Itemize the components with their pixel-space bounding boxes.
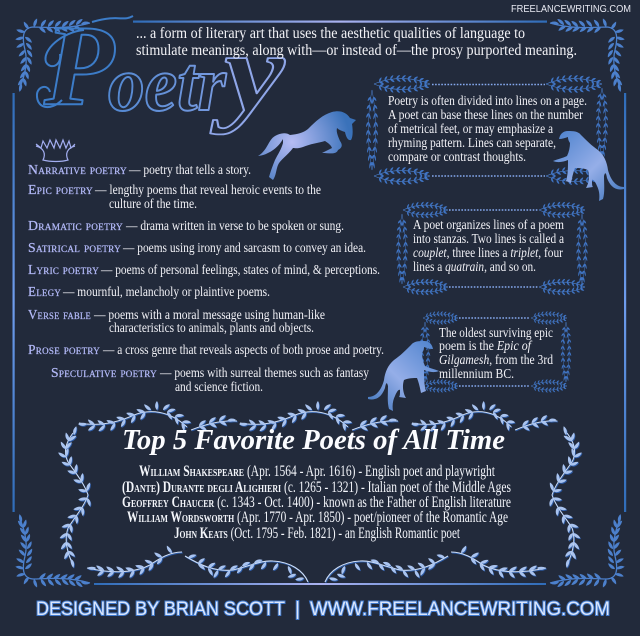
epic poetry: Epic poetry (28, 182, 93, 197)
speculative poetry: — poems with surreal themes such as fantasy (159, 365, 369, 380)
verse fable: Verse fable (28, 307, 91, 322)
title: Poetry (37, 2, 285, 135)
elegy: Elegy (28, 284, 61, 299)
panel: top 5 ornament frame (57, 401, 583, 583)
satirical poetry (28, 240, 366, 255)
panel: stanzas: into stanzas. Two lines is called a (413, 231, 564, 246)
panel: stanzas: A poet organizes lines of a poem (413, 217, 564, 232)
prose poetry: — a cross genre that reveals aspects of both prose and poetry. (102, 342, 384, 357)
verse fable (28, 307, 325, 335)
epic poetry: culture of the time. (109, 196, 197, 211)
list of poets: (Dante) Durante degli Alighieri (c. 1265 - 1321) - Italian poet of the Middle Ages (122, 479, 511, 496)
dramatic poetry: — drama written in verse to be spoken or sung. (125, 218, 344, 233)
verse fable: — poems with a moral message using human-like (93, 307, 325, 322)
satirical poetry: Satirical poetry (28, 240, 121, 255)
panel: oldest epic: millennium BC. (439, 366, 514, 381)
icon: panther on epic panel (368, 341, 439, 411)
lyric poetry (28, 262, 380, 277)
intro definition: ... a form of literary art that uses the aesthetic qualities of language to (136, 25, 525, 42)
footer credit (36, 598, 610, 620)
speculative poetry: Speculative poetry (51, 365, 157, 380)
prose poetry (28, 342, 384, 357)
panel: oldest epic: Gilgamesh, from the 3rd (439, 352, 553, 367)
list of poets: John Keats (Oct. 1795 - Feb. 1821) - an English Romantic poet (174, 525, 460, 542)
narrative poetry: — poetry that tells a story. (128, 162, 251, 177)
icon: panther on lines panel (553, 131, 624, 201)
epic poetry: — lengthy poems that reveal heroic events to the (94, 182, 321, 197)
epic poetry (28, 182, 321, 211)
icon: crown (36, 140, 75, 162)
panel: stanzas: lines a quatrain, and so on. (413, 259, 536, 274)
panel: lines: A poet can base these lines on the number (388, 107, 583, 122)
panel: lines: Poetry is often divided into lines on a page. (388, 93, 587, 108)
panel: lines: of metrical feet, or may emphasize a (388, 121, 553, 136)
list of poets (122, 463, 511, 542)
intro definition (136, 25, 577, 59)
title: Poetry: P (43, 2, 115, 129)
footer credit: DESIGNED BY BRIAN SCOTT (36, 598, 285, 620)
panel: lines: compare or contrast thoughts. (388, 149, 526, 164)
panel: lines: rhyming pattern. Lines can separate, (388, 135, 556, 150)
icon: leaping horse (258, 111, 356, 180)
satirical poetry: — poems using irony and sarcasm to convey an idea. (122, 240, 366, 255)
panel: stanzas: couplet, three lines a triplet, four (413, 245, 563, 260)
dramatic poetry (28, 218, 344, 233)
panel: lines (365, 74, 609, 186)
panel: oldest epic (419, 311, 572, 393)
list of poets: William Wordsworth (Apr. 1770 - Apr. 1850) - poet/pioneer of the Romantic Age (127, 509, 508, 526)
list of poets: William Shakespeare (Apr. 1564 - Apr. 1616) - English poet and playwright (139, 463, 495, 480)
title: Poetry: y (210, 10, 285, 135)
list of poetry types (28, 162, 384, 394)
dramatic poetry: Dramatic poetry (28, 218, 123, 233)
list of poets: Geoffrey Chaucer (c. 1343 - Oct. 1400) - known as the Father of English literature (122, 494, 511, 511)
lyric poetry: — poems of personal feelings, states of mind, & perceptions. (100, 262, 380, 277)
heading: top 5 poets: Top 5 Favorite Poets of All Time (122, 424, 505, 456)
elegy: — mournful, melancholy or plaintive poems. (62, 284, 270, 299)
narrative poetry: Narrative poetry (28, 162, 127, 177)
narrative poetry (28, 162, 251, 177)
intro definition: stimulate meanings, along with—or instead of—the prosy purported meaning. (136, 42, 577, 59)
prose poetry: Prose poetry (28, 342, 100, 357)
panel: oldest epic: poem is the Epic of (439, 338, 533, 353)
lyric poetry: Lyric poetry (28, 262, 99, 277)
footer credit: WWW.FREELANCEWRITING.COM (310, 598, 610, 620)
panel: oldest epic: The oldest surviving epic (439, 325, 553, 340)
footer credit: | (295, 598, 300, 620)
panel: stanzas (396, 201, 588, 296)
verse fable: characteristics to animals, plants and objects. (109, 320, 314, 335)
title: Poetry: oetr (108, 40, 227, 127)
speculative poetry (51, 365, 369, 394)
speculative poetry: and science fiction. (175, 379, 263, 394)
